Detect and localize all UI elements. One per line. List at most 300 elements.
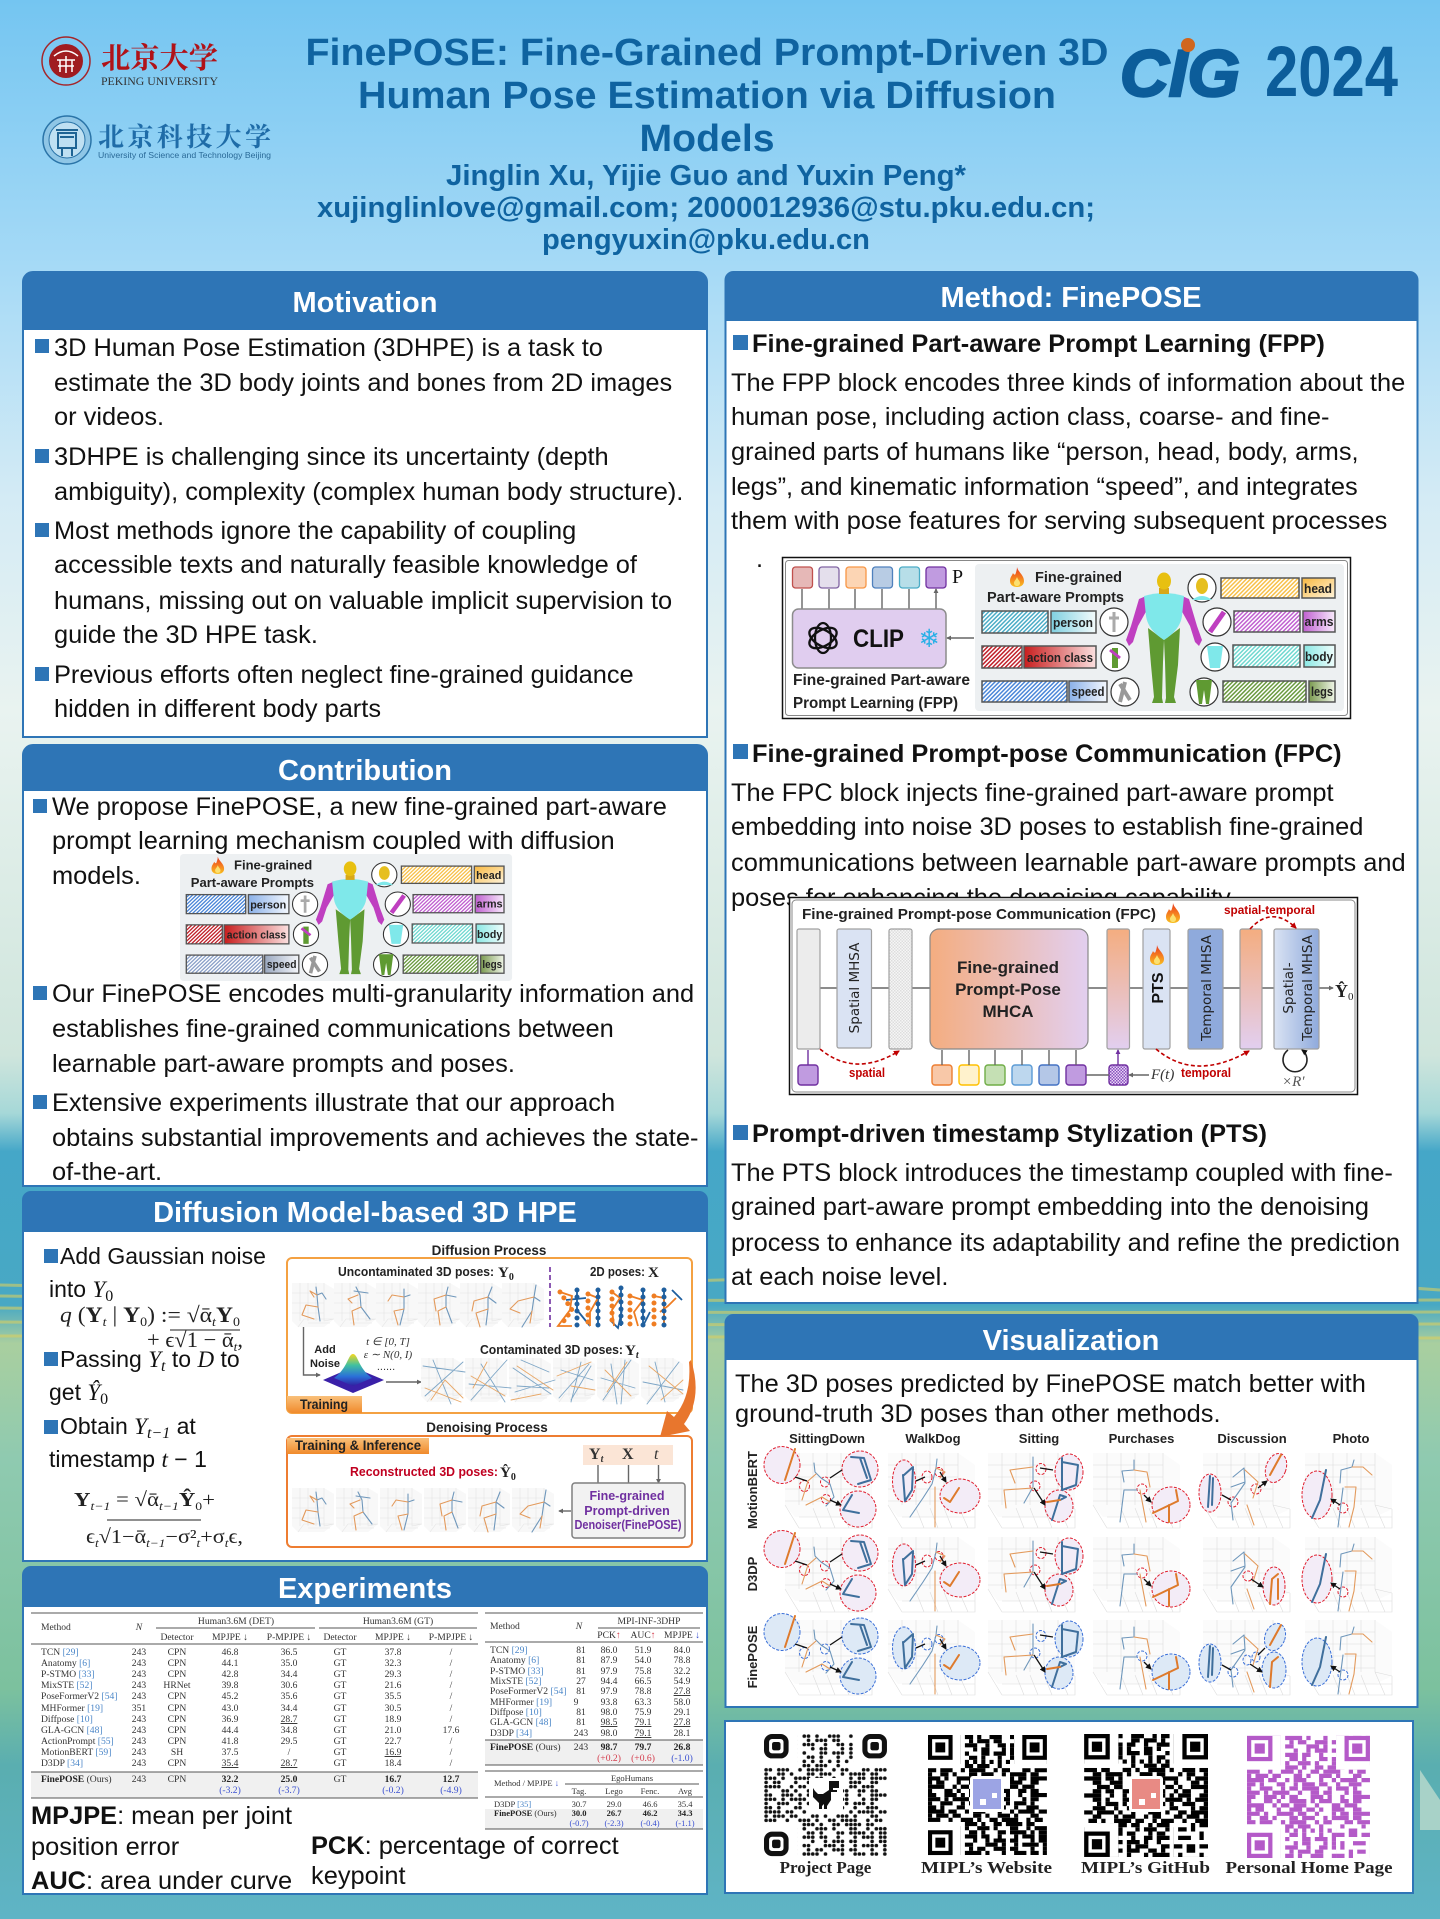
text: diffusion steps and formulas: timestamp t − 1 — [49, 1446, 207, 1472]
part-aware prompts — [975, 564, 1344, 711]
figure: FPC diagram: Ŷ — [1335, 981, 1348, 1001]
authors: Jinglin Xu, Yijie Guo and Yuxin Peng* — [446, 160, 967, 192]
table: Human3.6M: 34.4 — [281, 1669, 298, 1680]
table: Human3.6M: 243 — [132, 1691, 146, 1702]
text: diffusion steps and formulas: , — [237, 1327, 243, 1352]
figure: FPC diagram: ×R′ — [1282, 1074, 1305, 1090]
table: Human3.6M: 36.5 — [281, 1647, 298, 1658]
table: Human3.6M: GLA-GCN [48] — [41, 1725, 103, 1736]
table: MPI-INF-3DHP: MPJPE — [664, 1630, 693, 1641]
row: D3DP — [764, 1530, 1392, 1612]
CLIP encoder: ❄ — [919, 624, 939, 653]
table: EgoHumans: Method / MPJPE ↓ — [494, 1778, 559, 1788]
table: MPI-INF-3DHP: 98.7 — [601, 1742, 618, 1753]
panel: Visualization — [726, 1315, 1418, 1707]
text: diffusion steps and formulas: at — [170, 1413, 196, 1439]
table: Human3.6M: ActionPrompt [55] — [41, 1736, 114, 1747]
table: MPI-INF-3DHP: 66.5 — [635, 1676, 652, 1687]
table: MPI-INF-3DHP: 86.0 — [601, 1645, 618, 1656]
table: MPI-INF-3DHP: (+0.6) — [631, 1753, 655, 1764]
table: Human3.6M: MPJPE ↓ — [375, 1632, 411, 1643]
text: Motivation: Most methods ignore the capability of coupling — [54, 517, 576, 545]
table: Human3.6M: 34.8 — [281, 1725, 298, 1736]
table: MPI-INF-3DHP: 78.8 — [674, 1655, 691, 1666]
figure: diffusion process: X — [648, 1265, 659, 1281]
text: diffusion steps and formulas: t−1 — [159, 1499, 179, 1513]
table: Human3.6M: CPN — [168, 1703, 186, 1714]
table: Human3.6M: / — [450, 1703, 453, 1714]
column titles: SittingDown — [789, 1431, 865, 1446]
table: Human3.6M: GT — [334, 1714, 347, 1725]
inputs Yt X t: t — [654, 1446, 659, 1463]
figure: FPC diagram: Prompt-Pose — [955, 980, 1061, 999]
table: MPI-INF-3DHP: Method — [490, 1621, 520, 1632]
text: diffusion steps and formulas: into Y — [49, 1276, 105, 1302]
QR: MIPL's GitHub — [1081, 1734, 1210, 1877]
figure: part-aware prompts (contribution): arms — [477, 899, 503, 911]
logo: conference 2024 — [1120, 33, 1398, 112]
table: Human3.6M: GT — [334, 1703, 347, 1714]
table: MPI-INF-3DHP: 63.3 — [635, 1697, 652, 1708]
table: Human3.6M: GT — [334, 1658, 347, 1669]
table: Human3.6M: GT — [334, 1680, 347, 1691]
denoiser box: Prompt-driven — [584, 1504, 670, 1518]
text: diffusion steps and formulas — [44, 1243, 266, 1550]
table: MPI-INF-3DHP: 29.1 — [674, 1707, 691, 1718]
text: diffusion steps and formulas: + ϵ√1 − ᾱ — [147, 1327, 232, 1352]
table: MPI-INF-3DHP: 58.0 — [674, 1697, 691, 1708]
table: EgoHumans: 46.2 — [643, 1808, 657, 1818]
table: EgoHumans: (-0.7) — [569, 1818, 589, 1828]
table: Human3.6M: 37.5 — [222, 1747, 239, 1758]
heading: Diffusion: Diffusion Model-based 3D HPE — [153, 1197, 577, 1229]
panel: Motivation — [23, 272, 707, 737]
logo: Peking University: PEKING UNIVERSITY — [101, 74, 218, 88]
table: EgoHumans — [485, 1771, 703, 1829]
clean 3D pose row — [292, 1283, 544, 1327]
reconstructed 3D pose row — [292, 1488, 554, 1532]
table: Human3.6M: CPN — [168, 1691, 186, 1702]
column titles: Sitting — [1019, 1431, 1059, 1446]
table: Human3.6M: 29.5 — [281, 1736, 298, 1747]
figure: denoising process: Reconstructed 3D poses: — [350, 1464, 498, 1479]
legend: metrics: position error — [31, 1833, 180, 1861]
table: Human3.6M: Detector — [323, 1632, 357, 1643]
table: MPI-INF-3DHP: 94.4 — [601, 1676, 618, 1687]
subsection: FPC: Fine-grained Prompt-pose Communication (FPC) — [752, 740, 1342, 768]
text: diffusion steps and formulas: | — [107, 1302, 123, 1327]
gaussian noise surface — [323, 1354, 384, 1393]
table: Human3.6M: 36.9 — [222, 1714, 239, 1725]
table: Human3.6M: 25.0 — [281, 1774, 298, 1785]
text: diffusion steps and formulas: 0 — [233, 1314, 240, 1329]
table: Human3.6M: 42.8 — [222, 1669, 239, 1680]
table: Human3.6M: 243 — [132, 1680, 146, 1691]
table: MPI-INF-3DHP: 9 — [574, 1697, 579, 1708]
figure: FPC diagram: MHCA — [982, 1002, 1034, 1021]
heading: Denoising Process: Denoising Process — [426, 1420, 548, 1435]
text: Visualization: ground-truth 3D poses than other methods. — [735, 1400, 1221, 1428]
bottom prompt tokens — [798, 1065, 1128, 1085]
table: Human3.6M: 21.6 — [385, 1680, 402, 1691]
table: Human3.6M: 32.2 — [222, 1774, 239, 1785]
inputs Yt X t — [583, 1445, 673, 1465]
text: diffusion steps and formulas: t−1 — [90, 1499, 110, 1513]
text: diffusion steps and formulas: t−1 — [147, 1425, 170, 1442]
Training tab — [287, 1396, 362, 1413]
table: MPI-INF-3DHP: 79.7 — [635, 1742, 652, 1753]
table: Human3.6M: Anatomy [6] — [41, 1658, 90, 1669]
title: Models — [640, 118, 774, 160]
table: EgoHumans: 29.0 — [607, 1799, 621, 1809]
logo: Peking University — [42, 36, 218, 88]
figure: FPP diagram: Prompt Learning (FPP) — [793, 695, 958, 712]
text: Motivation: 3DHPE is challenging since its uncertainty (depth — [54, 443, 609, 471]
table: EgoHumans: Fenc. — [641, 1786, 659, 1796]
table: MPI-INF-3DHP: 98.0 — [601, 1728, 618, 1739]
table: Human3.6M: 30.5 — [385, 1703, 402, 1714]
text: diffusion steps and formulas: t — [234, 1339, 238, 1354]
text: Visualization: The 3D poses predicted by FinePOSE match better with — [735, 1370, 1366, 1398]
part-aware prompts: action class — [1027, 650, 1093, 665]
part-aware prompts: body — [1305, 649, 1334, 664]
inputs Yt X t: Y — [589, 1446, 601, 1463]
subsection: FPC — [731, 740, 1406, 912]
figure: part-aware prompts (contribution): legs — [482, 959, 502, 971]
table: Human3.6M: 22.7 — [385, 1736, 402, 1747]
table: EgoHumans: 46.6 — [643, 1799, 657, 1809]
text: Contribution: Our FinePOSE encodes multi-granularity information and — [52, 980, 694, 1008]
table: Human3.6M: TCN [29] — [41, 1647, 79, 1658]
column titles: Purchases — [1109, 1431, 1174, 1446]
contaminated 3D pose row — [421, 1358, 683, 1404]
figure: FPC diagram: spatial-temporal — [1224, 903, 1315, 917]
feature bars — [797, 929, 820, 1049]
table: Human3.6M: CPN — [168, 1669, 186, 1680]
text: diffusion steps and formulas: 0 — [105, 1288, 113, 1305]
figure: FPP diagram: Fine-grained Part-aware — [793, 672, 970, 689]
table: Human3.6M: CPN — [168, 1774, 186, 1785]
table: Human3.6M: P-MPJPE ↓ — [267, 1632, 311, 1643]
table: EgoHumans: (-1.1) — [675, 1818, 695, 1828]
table: Human3.6M: MixSTE [52] — [41, 1680, 92, 1691]
figure: denoising process: 0 — [511, 1472, 516, 1483]
table: MPI-INF-3DHP: MPI-INF-3DHP — [618, 1616, 680, 1627]
column titles — [789, 1431, 1369, 1446]
table: Human3.6M: CPN — [168, 1758, 186, 1769]
table: Human3.6M: 43.0 — [222, 1703, 239, 1714]
part-aware prompts: Fine-grained — [1035, 570, 1122, 586]
Spatial MHSA block — [837, 929, 872, 1048]
panel: Diffusion Model-based 3D HPE — [23, 1192, 707, 1561]
legend: metrics: keypoint — [311, 1862, 406, 1890]
figure: diffusion process: ε ∼ N(0, I) — [364, 1349, 413, 1361]
table: Human3.6M: 243 — [132, 1669, 146, 1680]
text: Contribution: prompt learning mechanism coupled with diffusion — [52, 827, 615, 855]
table: Human3.6M: 44.1 — [222, 1658, 239, 1669]
part-aware prompts: person — [1053, 615, 1093, 630]
table: Human3.6M: / — [450, 1714, 453, 1725]
table: Human3.6M: Detector — [160, 1632, 194, 1643]
bullets: Motivation — [35, 339, 49, 681]
text: diffusion steps and formulas: +σ — [200, 1526, 225, 1548]
table: MPI-INF-3DHP: ↓ — [693, 1630, 700, 1641]
text: diffusion steps and formulas: get Ŷ — [49, 1379, 100, 1405]
table: Human3.6M: 35.6 — [281, 1691, 298, 1702]
inputs Yt X t: X — [622, 1446, 634, 1463]
figure: diffusion process: Contaminated 3D poses: — [480, 1342, 623, 1357]
QR: MIPL's GitHub: MIPL’s GitHub — [1081, 1858, 1210, 1877]
text: diffusion steps and formulas: √1−ᾱ — [99, 1526, 147, 1548]
table: Human3.6M: CPN — [168, 1736, 186, 1747]
subsection: FPP: grained parts of humans like “person, head, body, arms, — [731, 438, 1359, 466]
logo: Peking University: 北京大学 — [101, 36, 218, 77]
table: Human3.6M: / — [450, 1680, 453, 1691]
figure: diffusion process: Y — [625, 1343, 636, 1359]
subsection: FPP: The FPP block encodes three kinds of information about the — [731, 369, 1405, 397]
figure: FPC diagram — [790, 898, 1358, 1094]
figure: diffusion process: 2D poses: — [590, 1264, 645, 1279]
table: Human3.6M: (-4.9) — [440, 1785, 462, 1796]
table: Human3.6M: / — [288, 1747, 291, 1758]
part-aware prompts: legs — [1311, 684, 1333, 699]
table: Human3.6M: 243 — [132, 1747, 146, 1758]
2D pose row — [558, 1288, 682, 1328]
text: diffusion steps and formulas: + — [202, 1489, 215, 1511]
table: Human3.6M: SH — [171, 1747, 183, 1758]
figure: diffusion process — [287, 1243, 692, 1413]
table: Human3.6M: (-3.2) — [219, 1785, 241, 1796]
table: MPI-INF-3DHP: 243 — [574, 1742, 588, 1753]
table: Human3.6M: / — [450, 1658, 453, 1669]
text: Contribution: obtains substantial improvements and achieves the state- — [52, 1124, 698, 1152]
subsection: PTS: at each noise level. — [731, 1263, 948, 1291]
figure: diffusion process: t — [636, 1350, 640, 1361]
table: Human3.6M: 243 — [132, 1758, 146, 1769]
heading: Method: Method: FinePOSE — [940, 282, 1202, 314]
table: MPI-INF-3DHP: 51.9 — [635, 1645, 652, 1656]
text: diffusion steps and formulas: Ŷ — [179, 1487, 196, 1511]
text: diffusion steps and formulas: Y — [123, 1302, 140, 1327]
CLIP encoder: CLIP — [853, 625, 904, 653]
text: diffusion steps and formulas: ϵ — [86, 1526, 94, 1548]
table: Human3.6M: 243 — [132, 1736, 146, 1747]
table: MPI-INF-3DHP: 87.9 — [601, 1655, 618, 1666]
subsection: FPP — [731, 330, 1405, 573]
table: MPI-INF-3DHP: 54.9 — [674, 1676, 691, 1687]
table: Human3.6M: GT — [334, 1747, 347, 1758]
text: Contribution — [52, 793, 698, 1186]
row: FinePOSE — [764, 1614, 1392, 1695]
table: Human3.6M: GT — [334, 1669, 347, 1680]
text: Contribution: establishes fine-grained communications between — [52, 1015, 614, 1043]
table: Human3.6M: / — [450, 1736, 453, 1747]
text: diffusion steps and formulas: ϵ, — [228, 1526, 243, 1548]
figure: FPC diagram: Spatial MHSA — [847, 942, 863, 1033]
table: Human3.6M: GT — [334, 1691, 347, 1702]
text: diffusion steps and formulas: t — [161, 1358, 166, 1375]
table: Human3.6M: 39.8 — [222, 1680, 239, 1691]
table: MPI-INF-3DHP: ↑ — [651, 1630, 656, 1641]
column titles: Photo — [1333, 1431, 1369, 1446]
text: Motivation: or videos. — [54, 403, 164, 431]
Training and Inference tab: Training & Inference — [295, 1438, 421, 1453]
text: diffusion steps and formulas: t — [225, 1536, 229, 1550]
title — [306, 32, 1108, 160]
table: MPI-INF-3DHP: PCK — [597, 1630, 616, 1641]
table: MPI-INF-3DHP: (-1.0) — [671, 1753, 693, 1764]
QR: MIPL's Website: MIPL’s Website — [921, 1858, 1053, 1877]
table: Human3.6M: D3DP [34] — [41, 1758, 83, 1769]
text: diffusion steps and formulas: 0 — [100, 1391, 108, 1408]
table: EgoHumans: (-2.3) — [604, 1818, 624, 1828]
table: Human3.6M: 28.7 — [281, 1758, 298, 1769]
figure: part-aware prompts (contribution): speed — [267, 959, 297, 971]
legend: metrics: MPJPE: mean per joint — [31, 1802, 292, 1830]
table: EgoHumans: 26.7 — [607, 1808, 622, 1818]
table: Human3.6M: 41.8 — [222, 1736, 239, 1747]
table: Human3.6M: 18.4 — [385, 1758, 402, 1769]
figure: FPC diagram: 0 — [1348, 991, 1354, 1003]
table: MPI-INF-3DHP: MHFormer [19] — [490, 1697, 552, 1708]
table: Human3.6M: 351 — [132, 1703, 146, 1714]
denoiser box: Fine-grained — [589, 1489, 665, 1503]
table: MPI-INF-3DHP: 54.0 — [635, 1655, 652, 1666]
text: Motivation: hidden in different body parts — [54, 695, 381, 723]
subsection: FPP: them with pose features for serving subsequent processes — [731, 507, 1387, 535]
table: Human3.6M: 30.6 — [281, 1680, 298, 1691]
table: MPI-INF-3DHP: AUC — [630, 1630, 651, 1641]
text: Visualization — [735, 1370, 1366, 1428]
table: Human3.6M: P-MPJPE ↓ — [429, 1632, 473, 1643]
part-aware prompts: speed — [1072, 684, 1105, 699]
CLIP encoder — [792, 609, 946, 668]
title: FinePOSE: Fine-Grained Prompt-Driven 3D — [306, 32, 1108, 74]
text: Contribution: We propose FinePOSE, a new fine-grained part-aware — [52, 793, 667, 821]
table: Human3.6M: 46.8 — [222, 1647, 239, 1658]
text: Motivation: humans, missing out on valuable implicit supervision to — [54, 587, 672, 615]
QR: MIPL's Website — [921, 1735, 1053, 1877]
text: diffusion steps and formulas: t — [197, 1536, 201, 1550]
table: MPI-INF-3DHP: 97.9 — [601, 1666, 618, 1677]
table: MPI-INF-3DHP: 81 — [576, 1666, 586, 1677]
table: Human3.6M: N — [135, 1622, 143, 1633]
subsection: PTS — [731, 1120, 1400, 1291]
figure: diffusion process: Noise — [310, 1358, 340, 1370]
figure: part-aware prompts (contribution) — [180, 854, 512, 981]
text: Motivation: guide the 3D HPE task. — [54, 621, 318, 649]
figure: FPC diagram: F(t) — [1150, 1067, 1174, 1083]
table: Human3.6M: 243 — [132, 1658, 146, 1669]
table: MPI-INF-3DHP: 98.5 — [601, 1717, 618, 1728]
table: Human3.6M: (-3.7) — [278, 1785, 300, 1796]
table: Human3.6M: GT — [334, 1736, 347, 1747]
Training tab: Training — [300, 1397, 348, 1412]
text: Motivation: Previous efforts often neglect fine-grained guidance — [54, 661, 634, 689]
figure: part-aware prompts (contribution): Fine-grained — [234, 858, 312, 872]
table: Human3.6M: GT — [334, 1647, 347, 1658]
table: MPI-INF-3DHP: PoseFormerV2 [54] — [490, 1686, 566, 1697]
subsection: FPC: The FPC block injects fine-grained part-aware prompt — [731, 779, 1334, 807]
table: Human3.6M: 16.7 — [385, 1774, 402, 1785]
table: Human3.6M: 17.6 — [443, 1725, 460, 1736]
figure: part-aware prompts (contribution): Part-aware Prompts — [191, 875, 314, 890]
row titles — [745, 1451, 760, 1688]
table: EgoHumans: Lego — [605, 1786, 623, 1796]
text: Motivation: 3D Human Pose Estimation (3DHPE) is a task to — [54, 334, 603, 362]
figure: part-aware prompts (contribution): person — [250, 900, 286, 911]
table: Human3.6M: 243 — [132, 1647, 146, 1658]
subsection: FPC: embedding into noise 3D poses to establish fine-grained — [731, 813, 1363, 841]
table: MPI-INF-3DHP: MixSTE [52] — [490, 1676, 541, 1687]
table: Human3.6M: 18.9 — [385, 1714, 402, 1725]
subsection: FPP: legs”, and kinematic information “speed”, and integrates — [731, 473, 1358, 501]
table: MPI-INF-3DHP: 79.1 — [635, 1717, 652, 1728]
connectors — [820, 987, 1333, 989]
inputs Yt X t: t — [601, 1454, 605, 1465]
subsection: FPP: . — [756, 545, 763, 573]
denoiser box — [572, 1483, 685, 1538]
row titles: MotionBERT — [745, 1451, 760, 1529]
table: EgoHumans: D3DP [35] — [494, 1799, 531, 1809]
panel: Contribution — [23, 745, 707, 1186]
subsection: PTS: The PTS block introduces the timestamp coupled with fine- — [731, 1159, 1393, 1187]
heading: Diffusion Process: Diffusion Process — [432, 1243, 546, 1258]
figure: FPP diagram: P — [952, 566, 963, 588]
table: Human3.6M — [31, 1613, 478, 1798]
table: Human3.6M: 243 — [132, 1774, 146, 1785]
table: Human3.6M: / — [450, 1758, 453, 1769]
figure: part-aware prompts (contribution): body — [477, 929, 503, 941]
text: diffusion steps and formulas: Y — [216, 1302, 233, 1327]
MHCA block — [930, 929, 1088, 1049]
PTS block — [1143, 929, 1170, 1049]
table: Human3.6M: GT — [334, 1774, 347, 1785]
logo: conference 2024: 2024 — [1265, 33, 1398, 112]
table: Human3.6M: P-STMO [33] — [41, 1669, 95, 1680]
table: Human3.6M: / — [450, 1747, 453, 1758]
table: MPI-INF-3DHP: 26.8 — [674, 1742, 691, 1753]
table: MPI-INF-3DHP: 78.8 — [635, 1686, 652, 1697]
QR: Project Page: Project Page — [780, 1858, 872, 1877]
Spatial-Temporal MHSA block — [1274, 929, 1319, 1049]
table: MPI-INF-3DHP: TCN [29] — [490, 1645, 528, 1656]
table: EgoHumans: EgoHumans — [611, 1773, 653, 1783]
table: MPI-INF-3DHP: FinePOSE (Ours) — [490, 1742, 561, 1753]
logo: University of Science and Technology Beijing — [43, 116, 271, 164]
text: Motivation: estimate the 3D body joints and bones from 2D images — [54, 369, 672, 397]
table: Human3.6M: Diffpose [10] — [41, 1714, 93, 1725]
authors: pengyuxin@pku.edu.cn — [542, 224, 870, 256]
row: MotionBERT — [764, 1446, 1392, 1528]
subsection: PTS: process to enhance its adaptability and refine the prediction — [731, 1229, 1400, 1257]
table: MPI-INF-3DHP: 97.9 — [601, 1686, 618, 1697]
logo: conference 2024: CIG — [1120, 36, 1240, 110]
table: Human3.6M: PoseFormerV2 [54] — [41, 1691, 117, 1702]
table: Human3.6M: / — [450, 1647, 453, 1658]
table: Human3.6M: FinePOSE (Ours) — [41, 1774, 112, 1785]
text: Contribution: Extensive experiments illustrate that our approach — [52, 1089, 615, 1117]
table: Human3.6M: / — [450, 1669, 453, 1680]
text: diffusion steps and formulas: t−1 — [146, 1536, 165, 1550]
table: Human3.6M: MHFormer [19] — [41, 1703, 103, 1714]
text: diffusion steps and formulas: t — [103, 1314, 107, 1329]
figure: FPC diagram: spatial — [849, 1065, 885, 1080]
table: Human3.6M: Method — [41, 1622, 71, 1633]
text: diffusion steps and formulas: Passing Y — [60, 1346, 161, 1372]
table: MPI-INF-3DHP: 98.0 — [601, 1707, 618, 1718]
part-aware prompts: arms — [1304, 614, 1334, 629]
